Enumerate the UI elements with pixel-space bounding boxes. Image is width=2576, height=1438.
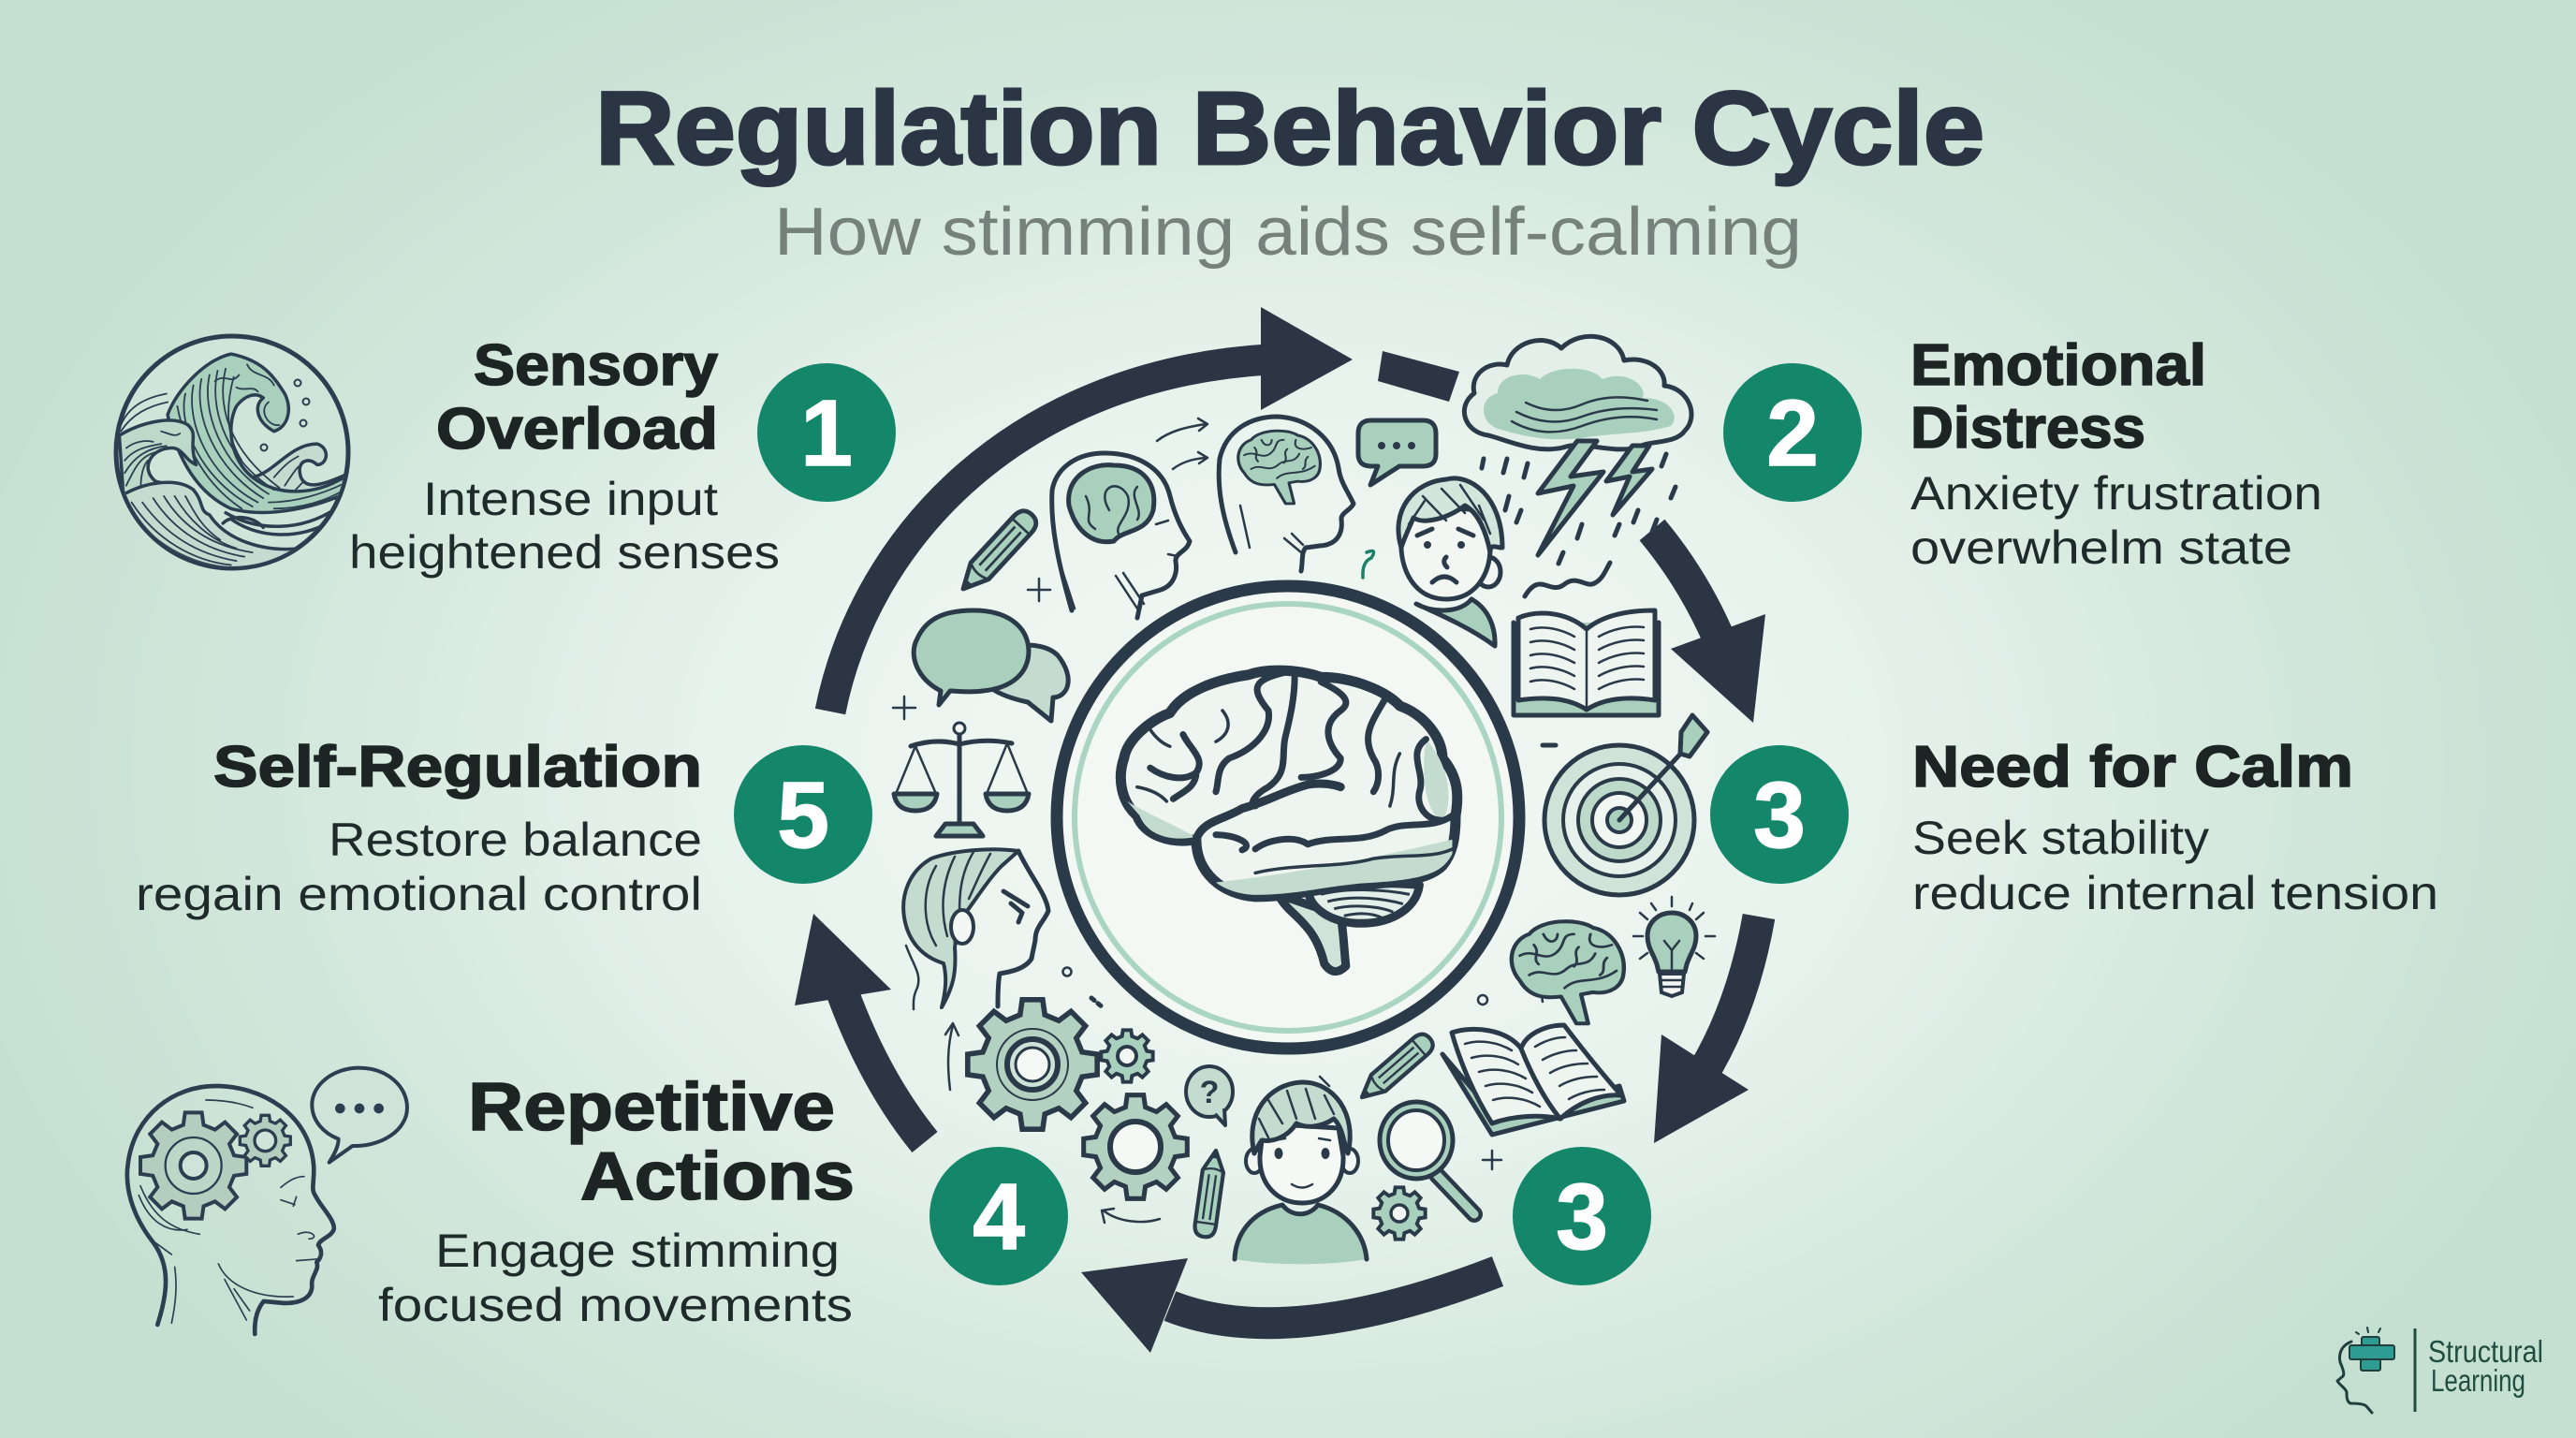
- text block: need for calm: [1912, 735, 2438, 919]
- text block: sensory overload: heightened senses: [349, 526, 780, 579]
- icon: tiny dash: [1543, 743, 1556, 747]
- icon: head with calm brain: [1052, 453, 1190, 618]
- icon: pencil upper left: [954, 506, 1041, 597]
- badge 2: [1723, 363, 1862, 502]
- icon: head with brain side view: [1219, 417, 1354, 571]
- text block: emotional distress: overwhelm state: [1910, 521, 2292, 574]
- icon: medium gear: [1084, 1095, 1187, 1198]
- arrow: step 1 to step 2: [830, 307, 1459, 712]
- icon: question bubble: ?: [1200, 1075, 1219, 1110]
- text block: emotional distress: Distress: [1910, 396, 2145, 461]
- icon: pencil lower: [1354, 1030, 1437, 1106]
- badge 4: [929, 1147, 1068, 1285]
- icon: plus sign: [1483, 1151, 1501, 1169]
- icon: magnifying glass: [1380, 1102, 1474, 1214]
- icon: small gear near magnifier: [1373, 1187, 1426, 1240]
- title: Regulation Behavior Cycle: [595, 71, 1984, 186]
- icon: speech bubble with dots: [1358, 420, 1436, 485]
- badge 3: 3: [1753, 763, 1806, 868]
- logo: Structural Learning: Structural: [2428, 1334, 2543, 1369]
- badge 3: [1710, 745, 1849, 884]
- text block: repetitive actions: Repetitive: [468, 1070, 835, 1145]
- badge 5: [734, 745, 872, 884]
- icon: target with arrow: [1544, 715, 1707, 895]
- icon: pencil vertical: [1193, 1149, 1226, 1239]
- text block: need for calm: Seek stability: [1912, 812, 2209, 864]
- icon: overlapping speech bubbles: [914, 610, 1068, 721]
- text block: sensory overload: Sensory: [474, 333, 719, 398]
- logo: Structural Learning: [2337, 1328, 2543, 1413]
- text block: emotional distress: Emotional: [1910, 333, 2206, 398]
- icon: question mark squiggle: [1363, 550, 1374, 578]
- badge 3 lower: 3: [1556, 1165, 1608, 1269]
- text block: self-regulation: [136, 735, 702, 920]
- icon: question bubble: [1186, 1066, 1233, 1125]
- arrow: step 4 to step 5: [795, 914, 925, 1142]
- icon: smiling boy: [1235, 1077, 1367, 1264]
- text block: self-regulation: regain emotional control: [136, 868, 702, 920]
- arrow: step 3b to step 4: [1081, 1258, 1498, 1353]
- text block: emotional distress: Anxiety frustration: [1910, 467, 2322, 520]
- icon: open book upper: [1514, 610, 1659, 715]
- icon: tilted open book: [1442, 1025, 1624, 1135]
- icon: sparkles: [893, 579, 1050, 719]
- icon: small motion arrows: [945, 1023, 1160, 1223]
- icon: tiny marks: [1063, 968, 1552, 1007]
- icon: lower brain: [1512, 921, 1624, 1023]
- text block: emotional distress: [1910, 333, 2322, 574]
- icon: profile with hair: [903, 849, 1048, 1009]
- icon: wave in circle: [116, 336, 349, 568]
- icon: central brain: [1120, 670, 1457, 972]
- icon: worried boy: [1398, 478, 1502, 646]
- text block: need for calm: reduce internal tension: [1912, 867, 2438, 919]
- arrow: step 3 to step 3b: [1654, 917, 1759, 1143]
- subtitle: How stimming aids self-calming: [774, 195, 1802, 270]
- text block: self-regulation: Restore balance: [329, 814, 702, 866]
- logo: Structural Learning: Learning: [2431, 1363, 2525, 1398]
- text block: need for calm: Need for Calm: [1912, 735, 2353, 800]
- icon: big gear: [968, 1000, 1097, 1129]
- badge 1: 1: [800, 381, 853, 486]
- text block: repetitive actions: [378, 1070, 855, 1331]
- text block: sensory overload: Intense input: [423, 473, 718, 525]
- text block: sensory overload: [349, 333, 780, 579]
- text block: sensory overload: Overload: [436, 397, 718, 462]
- central circle with brain: [1057, 586, 1519, 1049]
- text block: repetitive actions: Engage stimming: [435, 1225, 840, 1277]
- badge 2: 2: [1766, 381, 1819, 486]
- arrow: step 2 to step 3: [1652, 530, 1765, 723]
- text block: repetitive actions: focused movements: [378, 1279, 853, 1331]
- icon: light bulb: [1633, 897, 1715, 996]
- text block: self-regulation: Self-Regulation: [213, 735, 702, 800]
- badge 5: 5: [777, 763, 829, 868]
- cycle arrows: [795, 307, 1765, 1353]
- icon: small arrows: [1157, 418, 1208, 469]
- icon: balance scales: [894, 723, 1029, 836]
- text block: repetitive actions: Actions: [580, 1139, 855, 1214]
- badge 4: 4: [973, 1165, 1025, 1269]
- badge 1: [757, 363, 896, 502]
- icon: small gear top: [1101, 1030, 1153, 1082]
- icon: storm cloud with lightning: [1464, 336, 1691, 596]
- badge 3 lower: [1513, 1147, 1651, 1285]
- icon: head with gears and speech bubble: [127, 1068, 407, 1334]
